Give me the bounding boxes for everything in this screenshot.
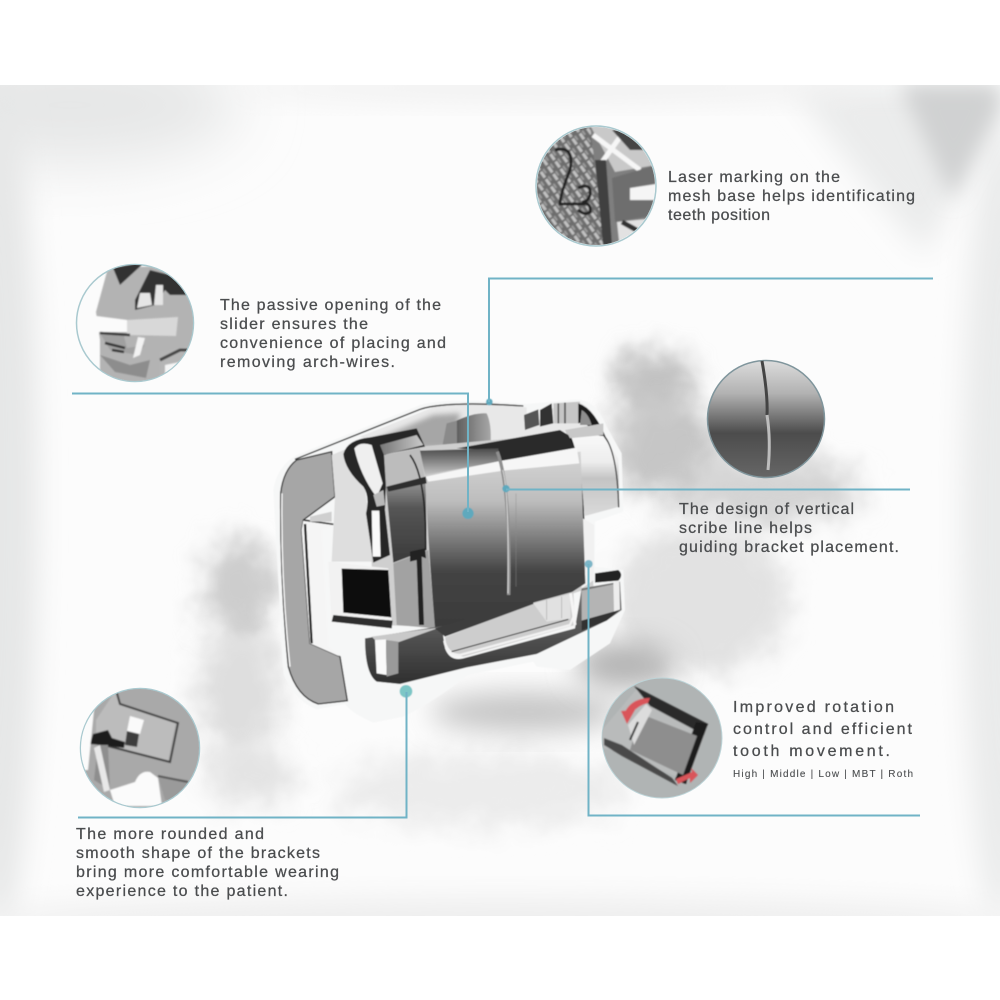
- icon: mesh base detail circle: [535, 125, 656, 250]
- right upper wing: [568, 433, 619, 516]
- text: scribe line: The design of vertical: [679, 501, 854, 518]
- text: laser marking: [668, 169, 915, 224]
- callout line: passive opening: [72, 394, 468, 512]
- text: passive opening: slider ensures the: [220, 316, 368, 333]
- bracket illustration: [273, 399, 625, 723]
- icon: vertical scribe line circle: [708, 360, 824, 478]
- icon: rounded shape detail circle: [80, 685, 205, 810]
- slider top highlight: [457, 430, 575, 462]
- central body: [367, 433, 593, 627]
- text: rotation control: High | Middle | Low | MBT | Roth: [733, 769, 913, 780]
- back top wing: [360, 403, 602, 450]
- text: scribe line: scribe line helps: [679, 520, 812, 537]
- icon: passive opening detail circle: [76, 262, 195, 385]
- text: rotation control: control and efficient: [733, 721, 913, 738]
- text: passive opening: [220, 297, 446, 371]
- archwire slot window: [445, 592, 575, 657]
- left rail: [302, 517, 340, 657]
- text: laser marking: Laser marking on the: [668, 169, 840, 186]
- icon: rotation control circle: [602, 678, 722, 798]
- text: rounded shape: smooth shape of the brackets: [76, 845, 320, 862]
- callout line: rounded shape: [78, 692, 406, 818]
- text: passive opening: removing arch-wires.: [220, 354, 395, 371]
- callout line: mesh base: [489, 278, 933, 402]
- lower bar: [365, 582, 622, 684]
- slider cover: [425, 452, 585, 628]
- left side column: [372, 511, 381, 557]
- left slot: [328, 562, 392, 622]
- back plate: [281, 452, 347, 704]
- scribe line: [497, 452, 509, 595]
- text: scribe line: [679, 501, 899, 556]
- callout line: rotation control: [588, 564, 920, 816]
- text: scribe line: guiding bracket placement.: [679, 539, 899, 556]
- text: rotation control: tooth movement.: [733, 743, 890, 760]
- text: passive opening: The passive opening of the: [220, 297, 441, 314]
- text: laser marking: mesh base helps identificating: [668, 188, 915, 205]
- text: rotation control: Improved rotation: [733, 699, 894, 716]
- smoke cloud: [198, 349, 865, 828]
- text: rounded shape: experience to the patient.: [76, 883, 288, 900]
- text: laser marking: teeth position: [668, 207, 770, 224]
- text: rounded shape: [76, 826, 339, 900]
- callout dots: [462, 508, 474, 519]
- text: rotation control: [733, 699, 913, 780]
- left top tie wing: [343, 428, 425, 563]
- text: rounded shape: The more rounded and: [76, 826, 264, 843]
- text: rounded shape: bring more comfortable wearing: [76, 864, 339, 881]
- callout line: scribe line: [506, 488, 910, 490]
- bracket white base outline: [273, 399, 625, 723]
- text: passive opening: convenience of placing and: [220, 335, 446, 352]
